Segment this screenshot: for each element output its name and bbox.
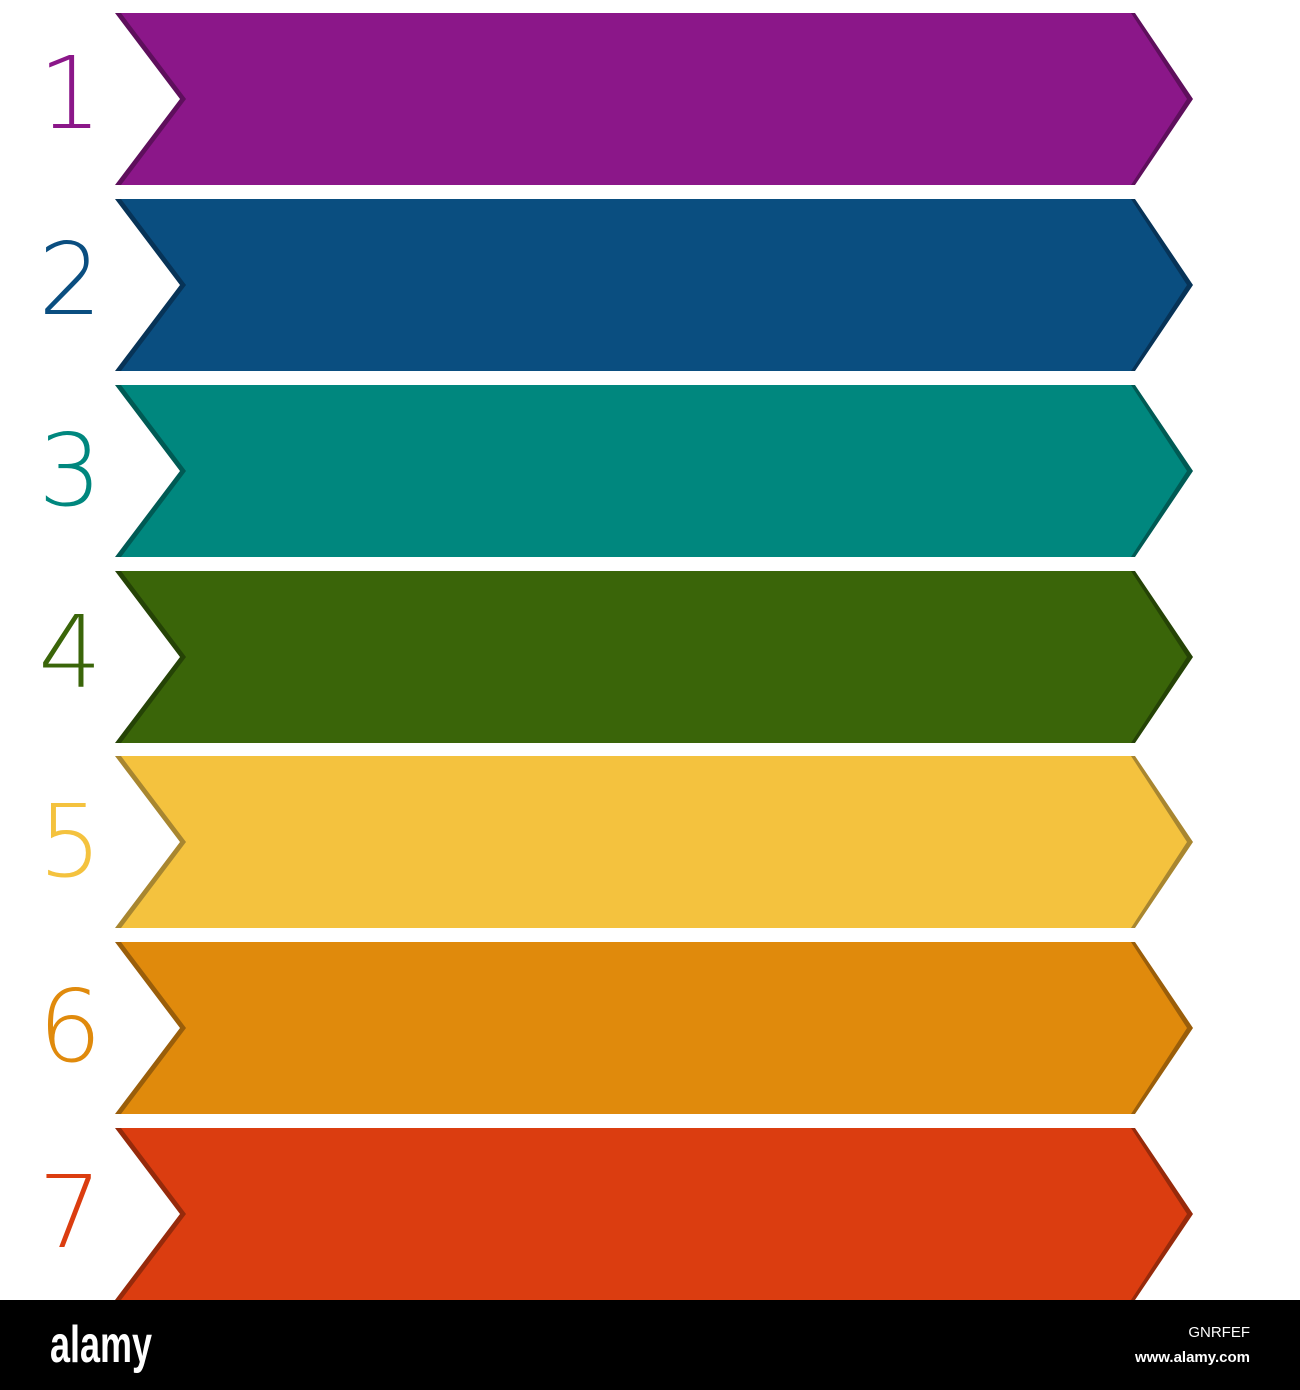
band 7 [38,1128,1193,1300]
number 2: 2 [38,221,102,338]
band 6 [38,942,1193,1114]
band 2 [38,199,1193,371]
number 7: 7 [38,1154,102,1271]
number 3: 3 [38,412,102,529]
number 5: 5 [38,783,102,900]
number 4: 4 [38,594,102,711]
footer image id: GNRFEF [1188,1324,1250,1341]
band 3 [38,385,1193,557]
band 4 [38,571,1193,743]
footer bar [0,1300,1300,1390]
number 1: 1 [38,35,102,152]
number 6: 6 [38,968,102,1085]
band 1 [38,13,1193,185]
footer url: www.alamy.com [1134,1349,1250,1366]
footer logo: alamy [50,1316,152,1374]
band 5 [38,756,1193,928]
